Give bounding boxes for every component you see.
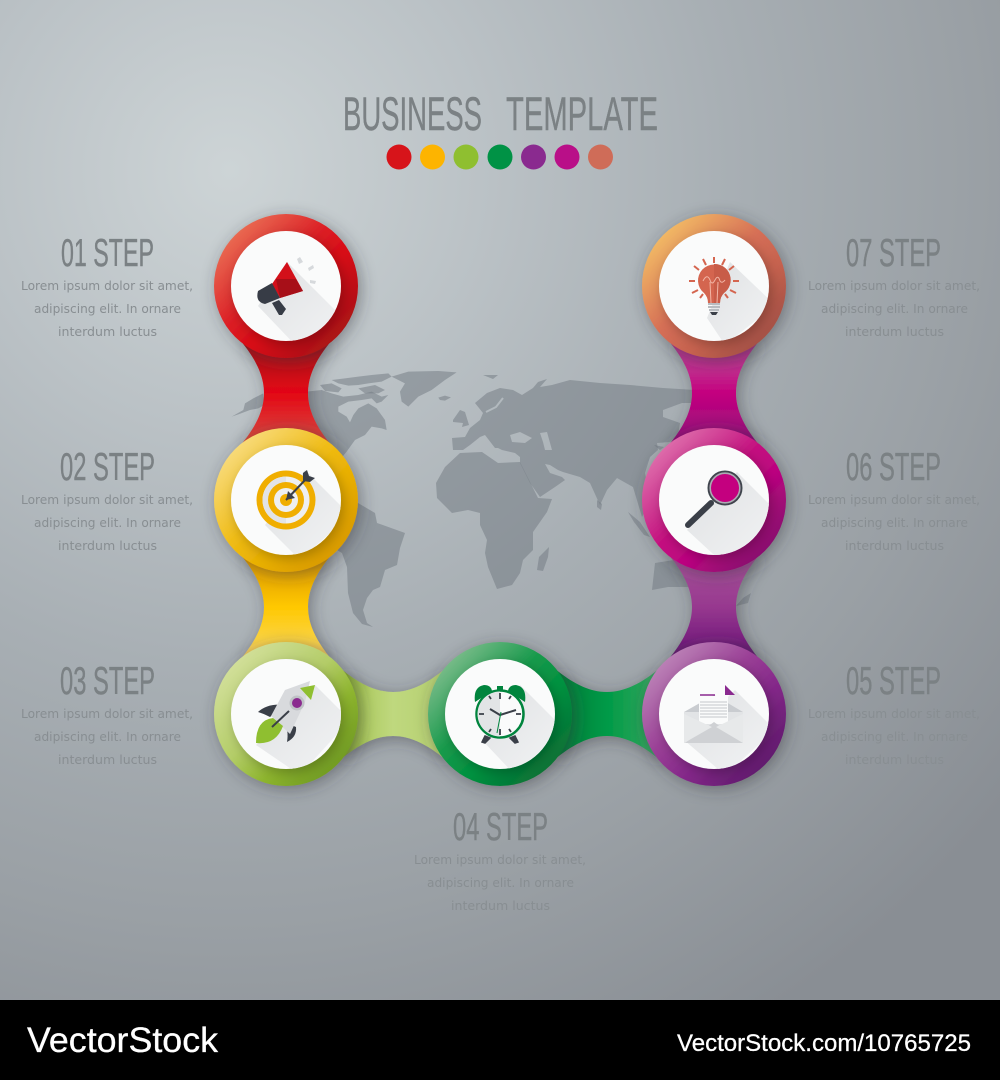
step label 04: interdum luctus — [451, 899, 550, 913]
step 2 node — [214, 428, 358, 572]
step label 07: Lorem ipsum dolor sit amet, — [808, 279, 980, 293]
step label 01: adipiscing elit. In ornare — [34, 302, 181, 316]
step label 05: Lorem ipsum dolor sit amet, — [808, 707, 980, 721]
step label 07: 07 STEP — [846, 232, 941, 275]
step 6 node — [642, 428, 786, 572]
connector: 03 to 04 — [340, 668, 446, 760]
step label 04 — [414, 806, 586, 913]
icon: megaphone — [257, 257, 316, 315]
step label 02: adipiscing elit. In ornare — [34, 516, 181, 530]
step label 07: interdum luctus — [845, 325, 944, 339]
step 3 node — [214, 642, 358, 786]
step label 07: adipiscing elit. In ornare — [821, 302, 968, 316]
step label 03: interdum luctus — [58, 753, 157, 767]
icon: alarm clock — [475, 685, 525, 743]
step label 03: Lorem ipsum dolor sit amet, — [21, 707, 193, 721]
step label 02 — [21, 446, 193, 553]
step 5 node — [642, 642, 786, 786]
icon: target — [256, 470, 316, 530]
step label 03 — [21, 660, 193, 767]
step label 05: interdum luctus — [845, 753, 944, 767]
step label 04: Lorem ipsum dolor sit amet, — [414, 853, 586, 867]
step label 06: interdum luctus — [845, 539, 944, 553]
step label 04: adipiscing elit. In ornare — [427, 876, 574, 890]
icon: envelope — [684, 685, 743, 743]
step label 06 — [808, 446, 980, 553]
step label 01: 01 STEP — [61, 232, 154, 275]
connector: 01 to 02 — [240, 340, 332, 446]
connectors — [240, 340, 760, 760]
connector: 05 to 06 — [668, 554, 760, 660]
step label 03: 03 STEP — [60, 660, 155, 703]
connector: 02 to 03 — [240, 554, 332, 660]
step label 05 — [808, 660, 980, 767]
step label 05: adipiscing elit. In ornare — [821, 730, 968, 744]
step label 05: 05 STEP — [846, 660, 941, 703]
step label 02: 02 STEP — [60, 446, 155, 489]
step label 06: Lorem ipsum dolor sit amet, — [808, 493, 980, 507]
step 7 node — [642, 214, 786, 358]
step label 07 — [808, 232, 980, 339]
step label 02: Lorem ipsum dolor sit amet, — [21, 493, 193, 507]
step label 01: interdum luctus — [58, 325, 157, 339]
step label 02: interdum luctus — [58, 539, 157, 553]
icon: rocket — [256, 681, 315, 743]
step label 01: Lorem ipsum dolor sit amet, — [21, 279, 193, 293]
title: TEMPLATE — [506, 87, 658, 140]
footer bar: VectorStock — [27, 1021, 219, 1060]
icon: light bulb — [689, 257, 739, 315]
step label 03: adipiscing elit. In ornare — [34, 730, 181, 744]
connector: 06 to 07 — [668, 340, 760, 446]
step 1 node — [214, 214, 358, 358]
world map — [232, 371, 751, 627]
footer bar: VectorStock.com/10765725 — [677, 1030, 971, 1057]
icon: magnifier — [688, 472, 742, 525]
step label 06: adipiscing elit. In ornare — [821, 516, 968, 530]
step label 06: 06 STEP — [846, 446, 941, 489]
step label 04: 04 STEP — [453, 806, 548, 849]
title: BUSINESS — [343, 87, 482, 140]
step 4 node — [428, 642, 572, 786]
step label 01 — [21, 232, 193, 339]
connector: 04 to 05 — [554, 668, 660, 760]
colour dots — [386, 144, 613, 170]
footer bar — [0, 1000, 1000, 1080]
